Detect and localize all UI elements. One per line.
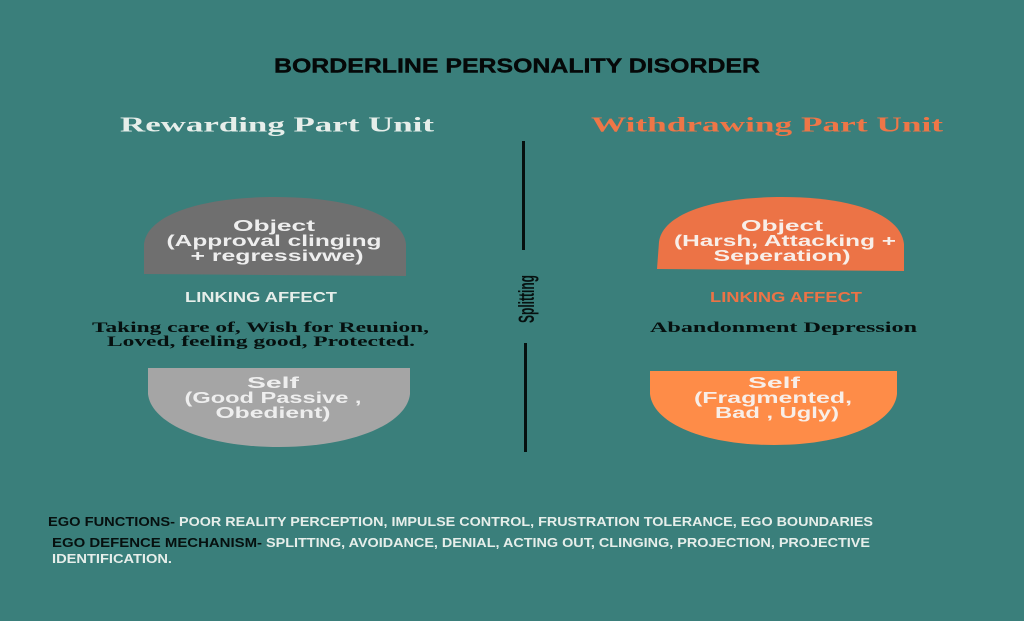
self shape and label <box>650 371 897 445</box>
linking affect label: LINKING AFFECT <box>710 289 862 306</box>
self shape and label <box>148 368 410 447</box>
self shape and label: Obedient) <box>216 405 330 422</box>
linking affect label: LINKING AFFECT <box>185 289 337 306</box>
self shape and label: Self <box>247 375 300 392</box>
panel: rewarding part unit <box>92 112 434 447</box>
self shape and label: Bad , Ugly) <box>715 405 839 422</box>
ego defence mechanism text: IDENTIFICATION. <box>52 552 172 566</box>
linking affect description: Abandonment Depression <box>650 320 918 336</box>
self shape and label: (Fragmented, <box>694 390 852 407</box>
heading: withdrawing part unit: Withdrawing Part Unit <box>591 112 943 136</box>
heading: rewarding part unit: Rewarding Part Unit <box>120 112 434 136</box>
splitting label: Splitting <box>514 275 539 323</box>
object shape and label: (Harsh, Attacking + <box>674 233 896 250</box>
object shape and label <box>144 197 406 276</box>
object shape and label: Object <box>741 218 824 235</box>
object shape and label: Object <box>233 218 316 235</box>
linking affect description: Loved, feeling good, Protected. <box>107 334 415 350</box>
object shape and label: Seperation) <box>714 248 850 265</box>
object shape and label: (Approval clinging <box>166 233 382 250</box>
ego functions text: EGO FUNCTIONS- <box>48 515 175 529</box>
self shape and label: (Good Passive , <box>184 390 362 407</box>
linking affect description: Taking care of, Wish for Reunion, <box>92 320 429 336</box>
divider: splitting <box>514 141 539 452</box>
ego functions text: POOR REALITY PERCEPTION, IMPULSE CONTROL, FRUSTRATION TOLERANCE, EGO BOUNDARIES <box>179 515 873 529</box>
linking affect description <box>92 320 429 350</box>
ego defence mechanism text: EGO DEFENCE MECHANISM- <box>52 536 262 550</box>
panel: withdrawing part unit <box>591 112 943 445</box>
title: BORDERLINE PERSONALITY DISORDER <box>274 54 760 78</box>
ego defence mechanism text <box>52 536 870 566</box>
ego defence mechanism text: SPLITTING, AVOIDANCE, DENIAL, ACTING OUT, CLINGING, PROJECTION, PROJECTIVE <box>266 536 870 550</box>
self shape and label: Self <box>748 375 801 392</box>
object shape and label <box>657 197 904 271</box>
object shape and label: + regressivwe) <box>190 248 364 265</box>
